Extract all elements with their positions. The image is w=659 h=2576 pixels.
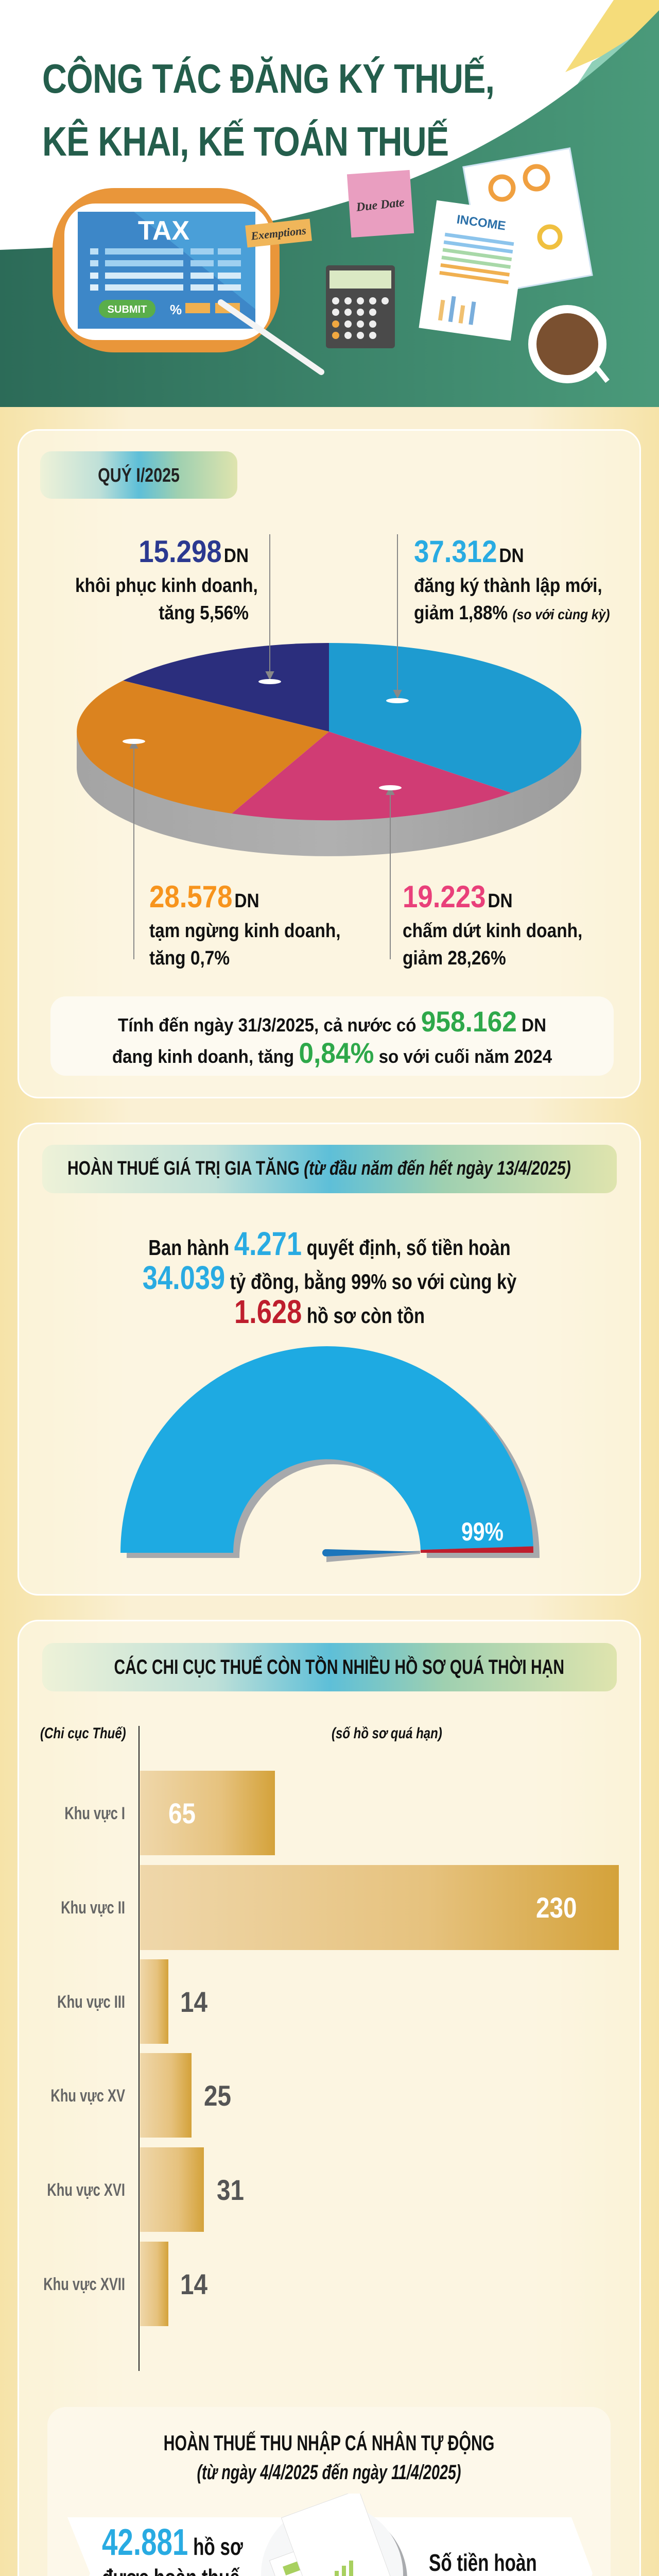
pie chart (77, 534, 582, 959)
label: 19.223: 19.223 DN (403, 879, 513, 914)
axis headers: (Chi cục Thuế) (40, 1725, 126, 1742)
header illustration: Due Date (355, 196, 405, 214)
label: 19.223 (403, 879, 582, 969)
header illustration (0, 0, 659, 407)
label: 37.312 (414, 534, 610, 624)
header illustration: INCOME (456, 212, 507, 233)
title: CÔNG TÁC ĐĂNG KÝ THUẾ, (42, 56, 494, 101)
tag: chi cục (42, 1643, 617, 1691)
tag: chi cục: CÁC CHI CỤC THUẾ CÒN TỒN NHIỀU HỒ SƠ QUÁ THỜI HẠN (114, 1656, 564, 1679)
gauge chart (120, 1346, 540, 1562)
label: 37.312: 37.312 DN (414, 534, 524, 569)
text: 42.881 hồ sơ: 42.881 hồ sơ (102, 2522, 243, 2563)
title: KÊ KHAI, KẾ TOÁN THUẾ (42, 118, 448, 164)
header illustration: % (170, 302, 182, 317)
label: 28.578: tăng 0,7% (149, 947, 230, 969)
box: hoàn thuế TNCN (47, 2407, 611, 2576)
panel: chi cục thuế (18, 1620, 641, 2576)
header illustration: SUBMIT (108, 304, 147, 315)
bar chart: 14 (180, 1986, 207, 2018)
stats text (143, 1225, 517, 1330)
label: 28.578: 28.578 DN (149, 879, 259, 914)
bar chart: Khu vực XVI (47, 2180, 125, 2200)
header illustration: TAX (138, 216, 189, 246)
label: 28.578 (149, 879, 341, 969)
gauge chart: 99% (461, 1517, 504, 1546)
bar chart: Khu vực XV (50, 2086, 125, 2106)
title (42, 56, 494, 164)
text: 229,6 tỷ đồng: Số tiền hoàn (429, 2549, 537, 2576)
tag: QUÝ I/2025 (40, 451, 237, 499)
stats text: 34.039 tỷ đồng, bằng 99% so với cùng kỳ (143, 1259, 516, 1296)
summary box: đang kinh doanh, tăng 0,84% so với cuối năm 2024 (112, 1037, 552, 1069)
label: 19.223: giảm 28,26% (403, 947, 506, 969)
header illustration: Exemptions (250, 224, 307, 243)
tag: hoàn thuế GTGT: HOÀN THUẾ GIÁ TRỊ GIA TĂNG (từ đầu năm đến hết ngày 13/4/2025) (67, 1158, 571, 1179)
arrow band (67, 2494, 593, 2576)
text: (số hồ sơ quá hạn) (332, 1725, 442, 1742)
summary box: Tính đến ngày 31/3/2025, cả nước có 958.162 DN (118, 1005, 546, 1038)
bar chart: 31 (217, 2174, 244, 2206)
label: 19.223: chấm dứt kinh doanh, (403, 920, 582, 942)
panel: hoàn thuế GTGT (18, 1123, 641, 1596)
label: 15.298 (75, 534, 258, 624)
bar chart: Khu vực II (61, 1898, 125, 1918)
label: 15.298: khôi phục kinh doanh, (75, 575, 258, 597)
bar chart: Khu vực III (57, 1992, 125, 2012)
bar chart: 14 (180, 2268, 207, 2300)
label: 28.578: tạm ngừng kinh doanh, (149, 920, 341, 942)
label: 15.298: tăng 5,56% (159, 602, 249, 624)
tag: QUÝ I/2025: QUÝ I/2025 (98, 465, 180, 486)
bar chart: 65 (168, 1797, 196, 1829)
heading: HOÀN THUẾ THU NHẬP CÁ NHÂN TỰ ĐỘNG (164, 2431, 494, 2455)
label: 37.312: đăng ký thành lập mới, (414, 575, 602, 597)
tag: hoàn thuế GTGT (42, 1145, 617, 1193)
bar chart: Khu vực I (64, 1804, 125, 1823)
bar chart: Khu vực XVII (43, 2275, 125, 2294)
heading: (từ ngày 4/4/2025 đến ngày 11/4/2025) (197, 2461, 461, 2484)
bar chart: 230 (536, 1891, 577, 1924)
stats text: Ban hành 4.271 quyết định, số tiền hoàn (148, 1225, 511, 1262)
heading (164, 2431, 494, 2484)
stats text: 1.628 hồ sơ còn tồn (234, 1293, 425, 1330)
summary box (50, 996, 614, 1076)
label: 37.312: giảm 1,88% (so với cùng kỳ) (414, 602, 610, 624)
bar chart: 25 (204, 2079, 231, 2112)
panel: quý I/2025 (18, 429, 641, 1098)
label: 15.298: 15.298 DN (138, 534, 249, 569)
